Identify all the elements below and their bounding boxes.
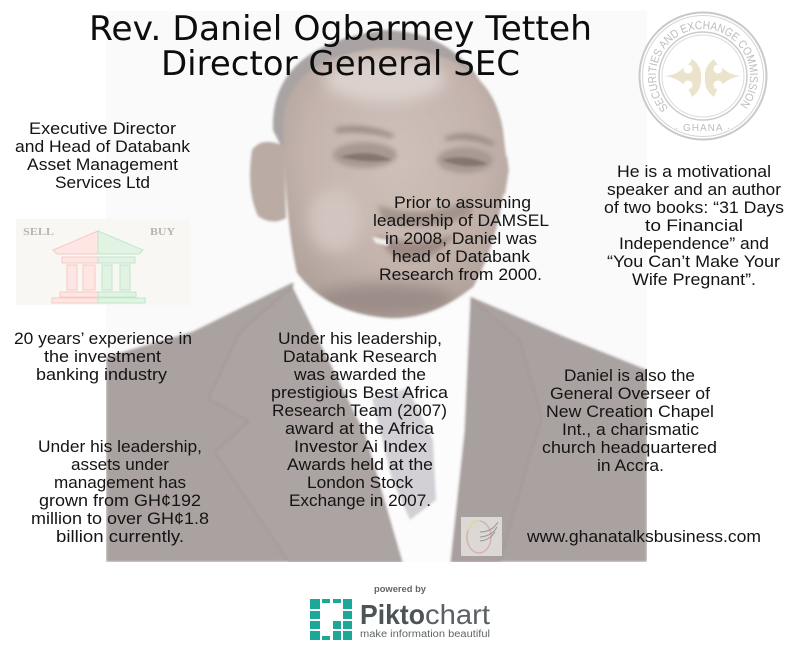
brows and eyes [333, 126, 495, 260]
shirt [290, 275, 471, 562]
icon: sell and buy bank building: SELL [23, 227, 54, 238]
text: motivational speaker: Wife Pregnant”. [632, 270, 756, 289]
icon: sell and buy bank building [16, 219, 190, 305]
text: executive director: Asset Management [27, 155, 178, 174]
text: motivational speaker: to Financial [645, 216, 743, 235]
text: prior role: head of Databank [392, 247, 531, 266]
text: motivational speaker: of two books: “31 Days [604, 198, 784, 217]
icon: piktochart mark [310, 599, 352, 640]
text: assets under management: assets under [71, 455, 169, 474]
text: research award: Exchange in 2007. [289, 491, 431, 510]
text: assets under management: Under his leadership, [38, 437, 202, 456]
text: motivational speaker: speaker and an author [607, 180, 781, 199]
text: research award: Under his leadership, [278, 329, 442, 348]
powered by piktochart: chart [425, 599, 490, 630]
powered by piktochart: powered by [374, 584, 426, 594]
icon: SEC Ghana seal: SECURITIES AND EXCHANGE COMMISSION [648, 21, 758, 112]
text: assets under management: management has [54, 473, 186, 492]
suit [106, 283, 647, 562]
text: research award: Databank Research [283, 347, 437, 366]
website url: www.ghanatalksbusiness.com [526, 527, 761, 546]
text: motivational speaker: He is a motivational [617, 162, 771, 181]
icon: SEC Ghana seal [638, 12, 768, 140]
text: research award [271, 329, 449, 510]
ear [250, 142, 286, 222]
text: years of experience: the investment [44, 347, 161, 366]
text: assets under management [31, 437, 209, 546]
title: Director General SEC [161, 44, 520, 84]
text: research award: award at the Africa [285, 419, 435, 438]
text: research award: prestigious Best Africa [271, 383, 449, 402]
text: assets under management: grown from GH¢192 [39, 491, 201, 510]
text: general overseer: New Creation Chapel [546, 402, 714, 421]
text: years of experience: banking industry [36, 365, 168, 384]
title [89, 9, 592, 84]
text: years of experience [14, 329, 192, 384]
left lapel [288, 287, 404, 562]
text: executive director: Services Ltd [55, 173, 150, 192]
text: prior role: Research from 2000. [379, 265, 542, 284]
text: executive director: and Head of Databank [15, 137, 191, 156]
text: prior role: leadership of DAMSEL [373, 211, 549, 230]
icon: ghana talks business logo [461, 517, 502, 556]
text: general overseer: church headquartered [542, 438, 717, 457]
powered by piktochart [310, 584, 490, 640]
text: prior role: in 2008, Daniel was [385, 229, 537, 248]
text: motivational speaker: “You Can’t Make Your [607, 252, 780, 271]
face [283, 48, 507, 318]
icon: SEC Ghana seal: · GHANA · [675, 123, 731, 134]
text: motivational speaker: Independence” and [619, 234, 769, 253]
icon: sell and buy bank building: BUY [150, 227, 175, 238]
text: prior role [373, 193, 549, 284]
powered by piktochart: Pikto [360, 599, 425, 630]
portrait photo [106, 11, 647, 562]
text: research award: Investor Ai Index [294, 437, 428, 456]
text: research award: Research Team (2007) [272, 401, 447, 420]
text: research award: London Stock [307, 473, 414, 492]
text: research award: Awards held at the [287, 455, 433, 474]
tie [372, 388, 436, 520]
powered by piktochart: make information beautiful [360, 629, 490, 640]
text: executive director: Executive Director [29, 119, 176, 138]
hair [273, 30, 498, 150]
text: general overseer: Daniel is also the [564, 366, 695, 385]
text: years of experience: 20 years’ experience in [14, 329, 192, 348]
text: research award: was awarded the [293, 365, 426, 384]
right lapel [451, 298, 542, 562]
text: assets under management: million to over GH¢1.8 [31, 509, 209, 528]
text: assets under management: billion currently. [56, 527, 184, 546]
title: Rev. Daniel Ogbarmey Tetteh [89, 9, 592, 49]
text: general overseer [542, 366, 717, 475]
text: general overseer: in Accra. [597, 456, 664, 475]
text: prior role: Prior to assuming [394, 193, 531, 212]
text: motivational speaker [604, 162, 784, 289]
text: executive director [15, 119, 191, 192]
text: general overseer: General Overseer of [550, 384, 710, 403]
text: general overseer: Int., a charismatic [562, 420, 700, 439]
